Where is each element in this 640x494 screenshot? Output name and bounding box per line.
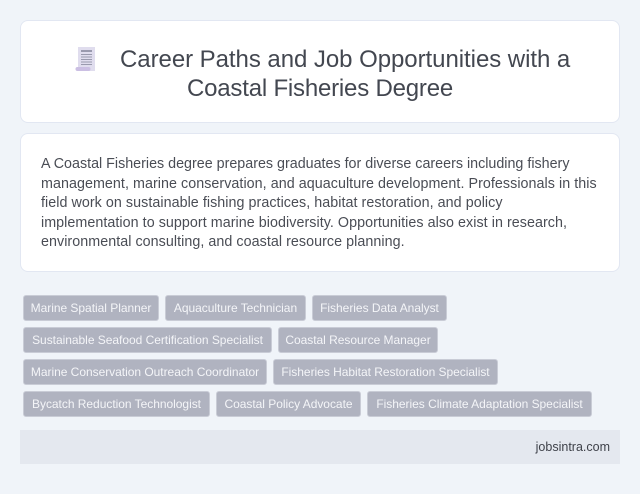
description text: management, marine conservation, and aquaculture development. Professionals in this — [41, 176, 597, 192]
footer bar — [20, 430, 620, 464]
tag: Fisheries Data Analyst — [320, 301, 439, 315]
tag: Marine Spatial Planner — [31, 301, 151, 315]
title line 2: Coastal Fisheries Degree — [187, 75, 453, 102]
tag: Marine Conservation Outreach Coordinator — [31, 365, 259, 379]
tag: Coastal Resource Manager — [285, 333, 431, 347]
panel: description card — [20, 133, 620, 272]
panel: career tags — [23, 295, 592, 417]
description text: field work on sustainable fishing practices, habitat restoration, and policy — [41, 195, 503, 211]
tag — [23, 359, 267, 385]
description text: environmental consulting, and coastal resource planning. — [41, 234, 405, 250]
tag: Aquaculture Technician — [174, 301, 297, 315]
tag — [216, 391, 361, 417]
panel: title card — [20, 20, 620, 123]
description text: A Coastal Fisheries degree prepares graduates for diverse careers including fishery — [41, 156, 569, 172]
description text: implementation to support marine biodiversity. Opportunities also exist in research, — [41, 215, 567, 231]
tag — [165, 295, 306, 321]
icon: document receipt — [76, 47, 95, 71]
description text — [41, 156, 597, 250]
tag — [23, 391, 210, 417]
tag: Sustainable Seafood Certification Specialist — [32, 333, 263, 347]
tag — [273, 359, 498, 385]
tag: Bycatch Reduction Technologist — [32, 397, 201, 411]
tag — [312, 295, 447, 321]
tag — [23, 295, 159, 321]
tag — [23, 327, 272, 353]
footer site name: jobsintra.com — [536, 440, 610, 454]
tag — [278, 327, 438, 353]
tag: Fisheries Habitat Restoration Specialist — [281, 365, 490, 379]
title line 1: Career Paths and Job Opportunities with a — [120, 46, 570, 73]
tag: Fisheries Climate Adaptation Specialist — [376, 397, 583, 411]
tag: Coastal Policy Advocate — [224, 397, 353, 411]
tag — [367, 391, 592, 417]
